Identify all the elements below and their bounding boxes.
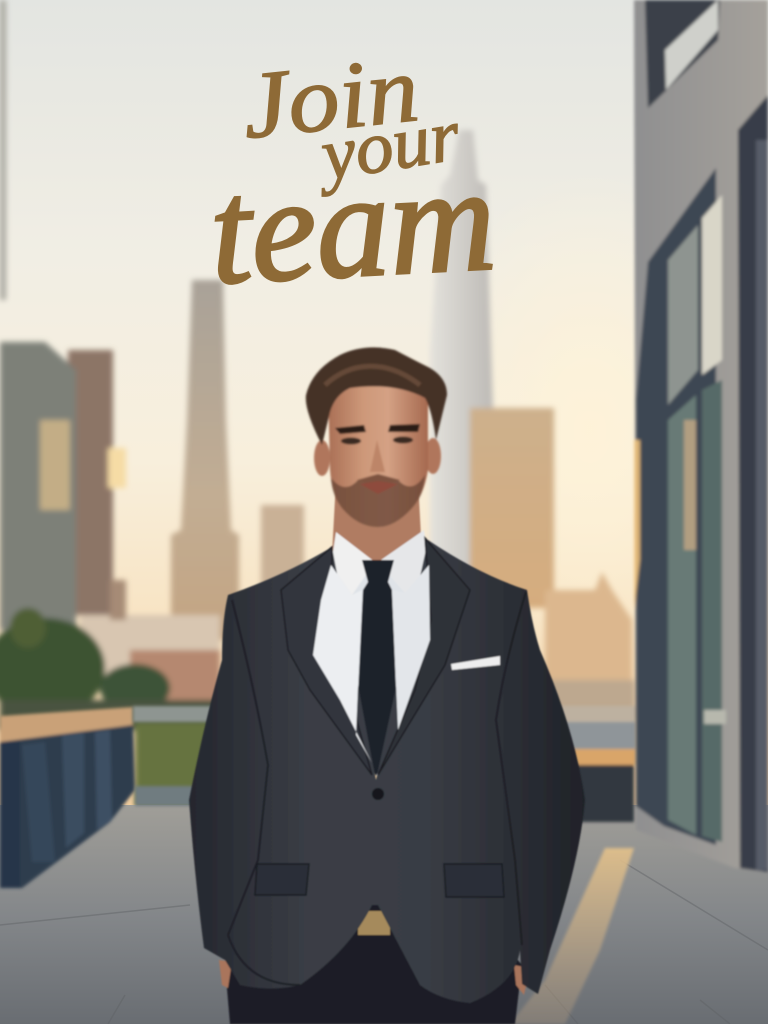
- left railing: [0, 707, 135, 888]
- sun glow: [420, 170, 760, 690]
- nose and mouth: [370, 440, 385, 472]
- belt: [358, 911, 390, 935]
- floor: [0, 805, 768, 1024]
- left lapel: [281, 547, 372, 775]
- back railings: [133, 706, 636, 822]
- jacket body: [189, 540, 585, 1003]
- trousers: [225, 880, 522, 1024]
- arm creases: [228, 592, 526, 985]
- beard: [331, 475, 425, 527]
- eyes: [335, 424, 420, 444]
- title: Join your team: [206, 36, 499, 316]
- pocket square: [451, 656, 500, 670]
- shirt: [312, 560, 432, 780]
- distant city skyline: [0, 0, 635, 807]
- title line: Join: Join: [237, 36, 423, 158]
- shirt opening: [313, 565, 372, 763]
- hair: [306, 347, 447, 445]
- right building: [634, 0, 768, 872]
- sunlight on floor: [510, 848, 634, 1024]
- buttons: [372, 788, 384, 800]
- title line: your: your: [309, 94, 466, 198]
- right lapel: [378, 538, 470, 775]
- man: [189, 347, 585, 1024]
- head: [306, 347, 447, 527]
- hands: [219, 960, 530, 995]
- title line: team: team: [206, 136, 499, 316]
- flap pockets: [255, 864, 504, 897]
- tie: [356, 560, 398, 776]
- neck: [332, 480, 422, 590]
- collar: [331, 530, 429, 595]
- floor paving lines: [0, 860, 768, 1024]
